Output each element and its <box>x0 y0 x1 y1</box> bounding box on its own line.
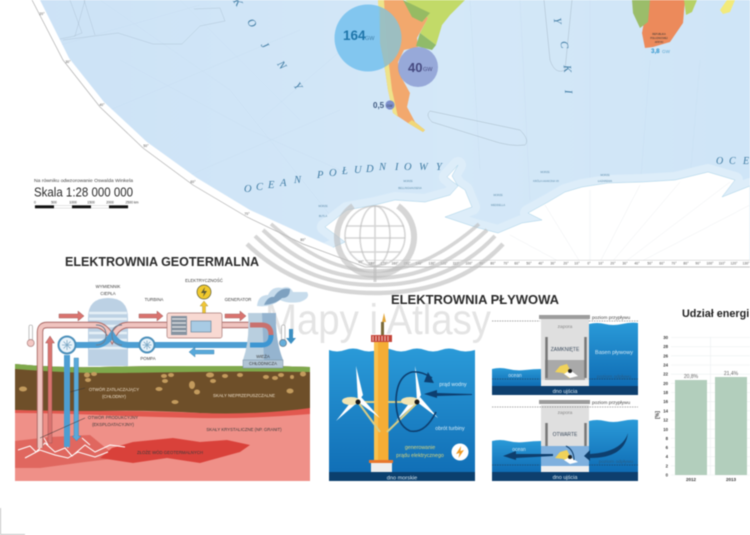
scale block: 2000 <box>106 200 114 204</box>
thermometer hot <box>27 325 34 346</box>
y axis labels: 22 <box>663 372 669 376</box>
dam lintel <box>539 315 590 319</box>
thermometer cold <box>280 325 286 346</box>
geothermal labels: CHŁODNICZA <box>249 361 277 366</box>
circle: 164 GW: GW <box>365 36 375 42</box>
ocean name: Pacific letters: N <box>274 58 289 72</box>
labels: ZAMKNIĘTE <box>551 347 580 353</box>
Southern Africa: REPUBLIKA <box>652 33 666 36</box>
graticule longitude labels: 60° <box>514 262 520 266</box>
labels: dno ujścia <box>553 475 578 481</box>
scale block: 500 <box>51 200 57 204</box>
heading: geothermal: ELEKTROWNIA GEOTERMALNA <box>65 254 259 269</box>
seabed <box>492 386 638 395</box>
basin right <box>589 323 638 386</box>
sea names: BELLINGHAUSENA <box>398 186 422 190</box>
ocean name: Pacific letters <box>230 0 305 94</box>
y axis labels <box>663 335 669 478</box>
circle: 40 GW <box>398 47 438 87</box>
hot water pipe <box>40 325 271 448</box>
tidal sea scene <box>329 348 475 482</box>
grid lines <box>671 337 750 475</box>
right turbine <box>396 366 438 421</box>
y axis labels: 18 <box>663 390 669 395</box>
arrows: flow direction <box>46 311 246 443</box>
scale block: Skala 1:28 000 000 <box>34 186 133 200</box>
dam body <box>541 405 589 446</box>
graticule longitude labels: 150° <box>403 262 411 266</box>
Southern Africa <box>632 0 735 48</box>
graticule latitude labels: 30° <box>65 60 71 64</box>
graticule longitude labels: 100° <box>465 262 473 266</box>
labels: poziom przypływu <box>592 400 630 406</box>
y axis labels: 8 <box>666 436 669 441</box>
Antarctica halo <box>318 158 750 246</box>
y axis labels: 26 <box>663 354 669 358</box>
sea names: MORZE <box>493 193 503 197</box>
circle: 40 GW: 40 <box>408 60 422 75</box>
y axis labels: 4 <box>666 454 669 459</box>
scale block: 0 <box>34 200 36 204</box>
scale block <box>34 178 139 208</box>
geothermal labels: (CHŁODNY) <box>102 394 127 399</box>
sea names: MORZE <box>403 179 413 183</box>
graticule longitude labels: 60° <box>659 262 665 266</box>
ocean name: Atlantic letters: K <box>561 64 573 74</box>
turbine struts <box>358 402 418 432</box>
sea names <box>318 170 612 218</box>
graticule longitude labels: 10° <box>574 262 580 266</box>
graticule longitude labels: 20° <box>563 262 569 266</box>
graticule longitude labels: 10° <box>598 262 604 266</box>
open channel <box>541 446 589 466</box>
graticule longitude labels <box>368 262 750 266</box>
y axis labels: 6 <box>666 445 669 450</box>
cold water pipe <box>67 335 271 447</box>
geothermal labels: SKAŁY KRYSTALICZNE (NP. GRANIT) <box>206 427 282 432</box>
graticule longitude labels: 50° <box>526 262 532 266</box>
geothermal labels: GENERATOR <box>225 297 251 302</box>
ocean left <box>492 440 541 472</box>
graticule latitude labels <box>39 12 364 264</box>
graticule longitude labels: 40° <box>634 262 640 266</box>
labels: OTWARTE <box>553 432 578 438</box>
y axis labels: 28 <box>663 344 669 349</box>
labels: Basen pływowy <box>595 350 633 356</box>
panel: dam open <box>492 400 638 481</box>
sea names: MORZE <box>600 173 610 177</box>
sea names: BUTLA <box>319 214 327 218</box>
panel: tidal power plant <box>329 292 560 482</box>
graticule latitude labels: 50° <box>143 144 149 148</box>
scale block: 2500 km <box>125 200 139 204</box>
arrow: flow from basin <box>584 433 628 461</box>
panel: energy share chart <box>655 308 750 482</box>
ocean left <box>492 368 541 386</box>
y axis labels: 14 <box>663 408 669 414</box>
graticule latitude labels: 20° <box>39 12 45 16</box>
graticule longitude labels: 70° <box>503 262 509 266</box>
axis unit: [%] <box>655 411 661 419</box>
labels <box>492 315 638 395</box>
corner crop mark <box>0 508 25 534</box>
graticule latitude labels: 80° <box>300 238 306 242</box>
arrow: turbine rotation <box>396 372 436 431</box>
seabed <box>492 472 638 481</box>
graticule longitude labels: 130° <box>428 262 436 266</box>
graticule longitude labels: 70° <box>671 262 677 266</box>
turbine <box>555 446 578 464</box>
arrow: cold down <box>286 329 296 344</box>
Pacific territory borders <box>60 0 225 44</box>
circle: 0,5 GW: 0,5 <box>373 101 385 110</box>
Antarctica <box>300 165 750 262</box>
geothermal labels: OTWÓR ZATŁACZAJĄCY <box>89 387 139 392</box>
watermark: globe emblem <box>247 206 503 293</box>
labels: poziom przypływu <box>592 315 630 321</box>
bar 2013 <box>715 371 747 482</box>
graticule latitude labels: 40° <box>99 103 105 107</box>
tidal labels: obrót turbiny <box>435 426 465 432</box>
dam foundation <box>541 380 589 386</box>
geothermal labels: SKAŁY NIEPRZEPUSZCZALNE <box>213 393 275 398</box>
y axis labels: 10 <box>663 427 669 432</box>
tidal labels: prądu elektrycznego <box>396 453 444 459</box>
tower <box>369 313 393 472</box>
dam lintel <box>539 400 590 404</box>
map frame border <box>32 0 750 267</box>
heat exchanger <box>88 298 128 366</box>
panel: geothermal power plant <box>15 254 310 481</box>
graticule longitude labels: 100° <box>706 262 714 266</box>
South America <box>378 0 465 132</box>
geothermal labels: WYMIENNIK <box>96 284 121 289</box>
graticule longitude labels: 90° <box>479 262 485 266</box>
y axis labels: 2 <box>666 464 669 468</box>
ocean name: Pacific letters: Y <box>291 80 305 94</box>
ocean name: Atlantic letters: Y <box>551 17 563 26</box>
left turbine <box>336 366 380 421</box>
South Atlantic island outlines <box>428 0 572 145</box>
geothermal labels: TURBINA <box>145 297 164 302</box>
labels: dno ujścia <box>553 389 578 395</box>
bar 2012: 20,8% <box>684 374 699 380</box>
pumps <box>58 336 154 354</box>
cooling tower <box>243 313 283 368</box>
bar 2012: 2012 <box>686 477 697 482</box>
labels: zapora <box>558 324 573 330</box>
graticule latitude labels: 60° <box>190 180 196 184</box>
graticule longitude labels: 160° <box>391 262 399 266</box>
circle: 164 GW: 164 <box>343 28 366 43</box>
y axis labels: 16 <box>663 399 669 404</box>
geothermal labels: OTWÓR PRODUKCYJNY <box>88 415 138 420</box>
graticule longitude labels: 110° <box>453 262 460 266</box>
ocean name: Pacific letters: O <box>244 17 259 30</box>
geothermal labels: ZŁOŻE WÓD GEOTERMALNYCH <box>137 450 203 455</box>
graticule longitude labels: 80° <box>683 262 689 266</box>
graticule longitude labels: 180° <box>368 262 376 266</box>
graticule longitude labels: 120° <box>730 262 738 266</box>
circle: 164 GW <box>334 4 402 72</box>
sea names: MORZE <box>540 170 550 174</box>
ocean name: Atlantic letters: I <box>562 88 574 95</box>
scale block: 1500 <box>87 200 95 204</box>
graticule longitude labels: 30° <box>550 262 556 266</box>
tidal labels <box>396 382 467 459</box>
scale block: Na równiku odwzorowanie Oswalda Winkela <box>34 178 134 183</box>
ocean name: Atlantic letters: C <box>558 41 570 50</box>
sea names: ŁAZAREWA <box>598 179 612 183</box>
tidal sea scene: dno morskie <box>387 476 417 482</box>
cold return bend <box>250 335 271 345</box>
bar 2013: 21,4% <box>724 371 739 377</box>
graticule longitude labels: 30° <box>622 262 628 266</box>
label: 3,8 GW <box>651 48 671 55</box>
y axis labels: 24 <box>663 362 669 368</box>
dam lower chamber <box>545 360 585 380</box>
geothermal labels: WIEŻA <box>256 354 270 359</box>
label: 3,8 GW: 3,8 <box>651 48 660 55</box>
dam body <box>541 319 589 380</box>
labels: poziom odpływu <box>597 374 632 380</box>
ocean <box>0 0 750 262</box>
basin right <box>589 420 638 472</box>
steam cloud <box>257 287 308 306</box>
sea names: WEDDELLA <box>491 203 505 207</box>
ocean name: Ocean right edge: OCE <box>716 156 749 167</box>
bar 2013: 2013 <box>726 477 737 482</box>
sea names: MORZE <box>318 204 328 208</box>
geothermal labels: CIEPŁA <box>100 291 116 296</box>
labels: ocean <box>512 447 526 453</box>
icon: bolt <box>452 444 468 460</box>
circle: 40 GW: GW <box>423 67 433 73</box>
circle: 0,5 GW: GW <box>386 104 393 108</box>
graticule longitude labels: 170° <box>380 262 388 266</box>
watermark: Mapy i Atlasy: Mapy i Atlasy <box>265 296 491 344</box>
ocean name: Ocean Południowy: OCEANPOŁUDNIOWY <box>244 162 443 195</box>
ocean name: Atlantic letters <box>551 17 574 95</box>
scale block: 1000 <box>69 200 77 204</box>
graticule longitude labels: 40° <box>538 262 544 266</box>
labels: zapora <box>558 410 573 416</box>
side rails <box>546 423 586 446</box>
dam foundation <box>541 466 589 472</box>
label: 3,8 GW: GW <box>662 49 671 54</box>
turbine <box>555 364 578 378</box>
Southern Africa: AFRYKI <box>655 41 664 44</box>
hot return bend <box>250 325 271 335</box>
turbine and generator <box>167 313 222 338</box>
graticule latitude labels: 90° <box>358 260 364 264</box>
graticule longitude labels: 110° <box>719 262 726 266</box>
tidal labels: prąd wodny <box>439 382 467 388</box>
circle: 0,5 GW <box>373 100 395 110</box>
labels: poziom odpływu <box>599 459 634 465</box>
arrow: electricity up <box>200 301 208 313</box>
graticule longitude labels: 0° <box>587 262 591 266</box>
world map <box>0 0 750 267</box>
y axis labels: 30 <box>663 335 669 340</box>
icon: electricity <box>197 285 211 299</box>
geothermal labels: POMPA <box>140 356 156 361</box>
panel: dam closed <box>492 315 638 395</box>
labels: ocean <box>508 373 522 379</box>
graticule longitude labels: 80° <box>490 262 496 266</box>
bar 2012 <box>675 374 707 482</box>
y axis labels: 20 <box>663 381 669 386</box>
y axis labels: 0 <box>666 472 669 478</box>
heat exchanger U-bends <box>96 325 122 345</box>
graticule longitude labels: 120° <box>440 262 448 266</box>
labels <box>492 400 638 481</box>
ground layers <box>15 364 310 481</box>
graticule longitude labels: 140° <box>415 262 423 266</box>
arrow: water current <box>424 390 472 398</box>
geothermal labels: ELEKTRYCZNOŚĆ <box>185 278 223 283</box>
y axis labels: 12 <box>663 418 669 422</box>
tidal labels: generowanie <box>405 445 435 451</box>
arrow: flow to ocean <box>503 451 553 460</box>
graticule longitude labels: 90° <box>695 262 701 266</box>
side rails <box>546 337 586 378</box>
graticule longitude labels: 50° <box>647 262 653 266</box>
graticule longitude labels: 130° <box>742 262 750 266</box>
Southern Africa: POŁUDNIOWEJ <box>650 37 669 40</box>
geothermal labels <box>40 278 282 455</box>
heading: tidal: ELEKTROWNIA PŁYWOWA <box>391 292 560 307</box>
graticule latitude labels: 70° <box>244 212 250 216</box>
sea names: KRÓLA HAAKONA VII <box>533 178 559 183</box>
geothermal labels: (EKSPLOATACYJNY) <box>92 422 134 427</box>
ocean name: Pacific letters: J <box>258 40 271 52</box>
graticule longitude labels: 20° <box>610 262 616 266</box>
